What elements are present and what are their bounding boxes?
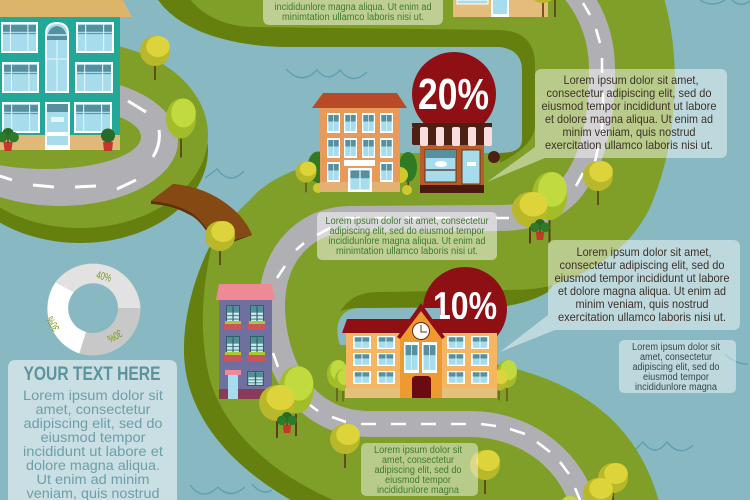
left text panel bbox=[8, 360, 177, 500]
callout box: 10%: exercitation ullamco laboris nisi ut. bbox=[558, 310, 726, 324]
small text box right: amet, consectetur bbox=[640, 352, 713, 363]
panel body text: incididunt ut labore et bbox=[23, 443, 163, 459]
center text box bbox=[317, 212, 497, 260]
roof bbox=[0, 0, 132, 17]
callout box: 10%: Lorem ipsum dolor sit amet, bbox=[576, 245, 712, 259]
panel body text: Lorem ipsum dolor sit bbox=[23, 387, 163, 403]
tower bbox=[400, 310, 442, 398]
small text box right bbox=[619, 340, 736, 393]
top-right building fragment bbox=[453, 0, 548, 17]
dark rim: left edge bbox=[184, 240, 345, 500]
trees behind orange building bbox=[296, 152, 417, 195]
main winding road bbox=[272, 0, 603, 500]
panel body text: amet, consectetur bbox=[36, 401, 151, 417]
water inlet bbox=[337, 308, 440, 345]
main roof bbox=[342, 319, 497, 333]
callout box: 20%: eiusmod tempor incididunt ut labore bbox=[542, 99, 717, 113]
clock bbox=[412, 322, 430, 340]
water waves bbox=[190, 0, 750, 494]
panel body text: adipiscing elit, sed do bbox=[24, 415, 163, 431]
10% badge: 10% bbox=[433, 285, 497, 328]
20% badge bbox=[412, 52, 496, 136]
roof bbox=[312, 93, 407, 108]
10% badge bbox=[423, 267, 507, 351]
center text box: minimtation ullamco laboris nisi ut. bbox=[336, 246, 478, 257]
center text box: Lorem ipsum dolor sit amet, consectetur bbox=[326, 216, 489, 227]
bottom text box bbox=[361, 443, 478, 496]
callout box: 10%: et dolore magna aliqua. Ut enim ad bbox=[558, 284, 726, 298]
arch window bbox=[46, 23, 68, 92]
panel body text: dolore magna aliqua. bbox=[26, 457, 160, 473]
dark rim: upper channel bbox=[155, 0, 535, 163]
tree by bridge bbox=[205, 221, 235, 265]
donut chart: 40% bbox=[95, 269, 113, 285]
door bbox=[45, 102, 70, 150]
trees beside school bbox=[327, 360, 517, 401]
callout box: 20%: Lorem ipsum dolor sit amet, bbox=[564, 73, 698, 87]
top text box bbox=[263, 0, 443, 25]
callout box: 10%: minim veniam, quis nostrud bbox=[576, 297, 708, 311]
top text box: incididunlore magna aliqua. Ut enim ad bbox=[274, 2, 432, 13]
callout box: 20%: exercitation ullamco laboris nisi ut. bbox=[545, 138, 713, 152]
small text box right: eiusmod tempor bbox=[643, 372, 710, 383]
wooden bridge bbox=[151, 184, 252, 242]
panel body text bbox=[23, 387, 163, 500]
school building bbox=[342, 303, 497, 398]
small text box right: Lorem ipsum dolor sit bbox=[632, 342, 720, 353]
cafe shop bbox=[412, 123, 500, 193]
top-right trees bbox=[528, 0, 570, 17]
center text box: incididunlore magna aliqua. Ut enim ad bbox=[328, 236, 486, 247]
island: top-left land bbox=[0, 42, 208, 243]
donut chart: 30% bbox=[44, 314, 62, 333]
island road bbox=[0, 76, 178, 206]
awning bbox=[412, 123, 492, 146]
school door bbox=[412, 376, 431, 398]
cafe sign bbox=[488, 151, 500, 163]
bottom text box: amet, consectetur bbox=[382, 455, 455, 466]
callout box: 20%: et dolore magna aliqua. Ut enim ad bbox=[545, 112, 713, 126]
orange apartment building bbox=[312, 93, 407, 192]
tree cluster with planter near road bbox=[259, 366, 360, 468]
central S-shaped land bbox=[155, 0, 675, 500]
roof bbox=[216, 284, 275, 300]
dark rim: school inlet bbox=[340, 285, 553, 312]
purple building bbox=[216, 284, 275, 399]
bottom text box: incididunlore magna bbox=[377, 485, 459, 496]
bottom-right trees bbox=[470, 450, 628, 500]
callout box: 10% bbox=[500, 240, 740, 352]
panel heading: YOUR TEXT HERE bbox=[24, 364, 160, 385]
tree cluster right with planter bbox=[512, 161, 613, 243]
small text box right: adipiscing elit, sed do bbox=[632, 362, 720, 373]
bottom text box: adipiscing elit, sed do bbox=[374, 465, 462, 476]
donut chart: 30% bbox=[105, 327, 124, 345]
donut chart bbox=[44, 264, 141, 356]
bottom text box: Lorem ipsum dolor sit bbox=[374, 445, 462, 456]
panel body text: Ut enim ad minim bbox=[36, 471, 150, 487]
teal building bbox=[0, 0, 132, 151]
top text box: minimtation ullamco laboris nisi ut. bbox=[282, 12, 424, 23]
callout box: 20%: minim veniam, quis nostrud bbox=[562, 125, 696, 139]
callout box: 20% bbox=[487, 69, 727, 182]
bottom text box: eiusmod tempor bbox=[385, 475, 452, 486]
island trees bbox=[140, 36, 196, 158]
small text box right: incididunlore magna bbox=[635, 382, 717, 393]
center text box: adipiscing elit, sed do eiusmod tempor bbox=[330, 226, 485, 237]
20% badge: 20% bbox=[418, 70, 489, 119]
panel body text: eiusmod tempor bbox=[40, 429, 146, 445]
callout box: 10%: consectetur adipiscing elit, sed do bbox=[560, 258, 725, 272]
callout box: 20%: consectetur adipiscing elit, sed do bbox=[546, 86, 712, 100]
right planter bbox=[101, 128, 115, 151]
callout box: 10%: eiusmod tempor incididunt ut labore bbox=[554, 271, 730, 285]
